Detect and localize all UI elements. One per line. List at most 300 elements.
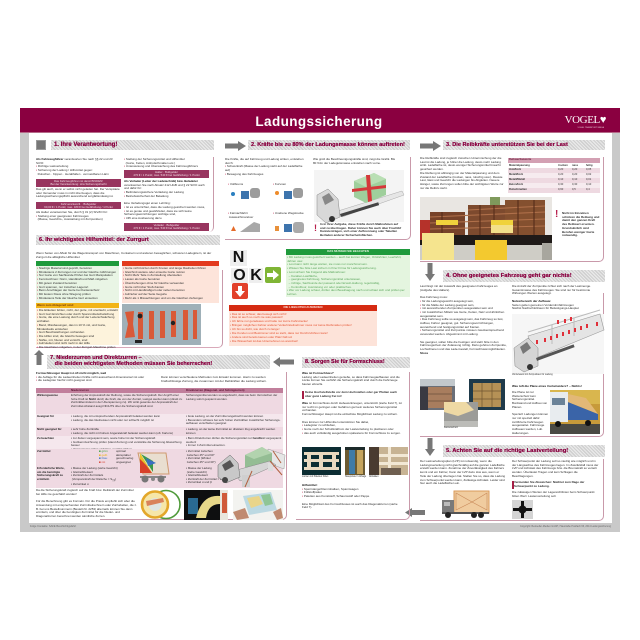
red warnings text <box>230 312 352 343</box>
photo: tipper truck <box>550 390 600 434</box>
panel border 8 <box>296 372 410 520</box>
text 2a: ▪ Bewegung des Fahrzeuges <box>225 172 263 176</box>
text 4a: Stoss <box>420 351 428 355</box>
text 1d: ▪ Unterweisung und Überwachung des Fahrzeugführers <box>124 164 198 168</box>
yellow text: ▪ Gurt Gurt Einrichten oder durch Spannmittelschwächung <box>37 312 114 316</box>
panel border 6 <box>36 270 223 348</box>
red text: ▪ Gurte nicht kürzen durch Knoten und lange Rauheiten führen <box>123 266 206 270</box>
red list: don'ts <box>122 261 219 303</box>
green text: ▪ Nur Gurte von Sachkunde Prüfen bei Gurt Manipulation <box>37 273 113 277</box>
text 7c: Da die Sicherungskraft zugleich auf die Kraft bzw. Reibkraft der Zurrmittel bei Hilfe nie geschätzt werden! <box>36 488 134 496</box>
text 1e: ▪ Betriebssicherheit der Beladung <box>124 194 168 198</box>
yellow text: ▪ Gurte, die eine Lastung durch und der Leiterschwächung enthalten <box>37 315 114 323</box>
text 1a: Als Fahrzeugführer verantworten Sie nach §§ 22 und 23 StVO: <box>36 157 113 165</box>
panel: 4 vehicle <box>420 284 604 437</box>
text 4c: Speziell: Ladungen können nur mit speziell dafür zertifizierte Fahrzeugen ausgestattet. Fahrzeuge Aufbauen werden, Lub. Halterungen. <box>512 412 548 435</box>
row Geeignet für <box>36 414 283 426</box>
icon: small sign <box>275 226 279 231</box>
row Erforderliche Werte: ▪ Masse der Ladung (siehe Gewicht) <box>71 466 118 470</box>
green text: ▪ Mit gutem Zustand benutzen <box>37 281 77 285</box>
red warnings text: • Das ist auch so noch nie was passiert! <box>230 315 283 319</box>
photo: boxes in container <box>469 379 505 410</box>
icon: centre of gravity cross <box>512 500 533 519</box>
angle legend: ■ grün <box>99 449 108 453</box>
text 4a: ▪ für die Maße der Ladung geeignet sein, <box>420 303 474 307</box>
icon: blue sign <box>231 192 235 196</box>
text 1e <box>124 179 205 220</box>
callout 1c: Halter · Bußgelder <box>155 170 178 174</box>
text 3 <box>420 156 504 190</box>
panel border 4 <box>420 293 604 437</box>
red text: ▪ Nicht Mehr Teile in Zurrstellung überstellen <box>123 273 182 277</box>
green text: ▪ Mit festem Klaus ohne Wiegung prüfen <box>37 292 91 296</box>
row Geeignet für: ▪ feste Ladung, an der Zurrmittel angebracht werden können <box>186 414 263 418</box>
table row header <box>508 163 600 168</box>
photo: stacked steel load on truck <box>420 197 552 260</box>
table row header: trocken <box>558 164 568 167</box>
red warnings text: • Die Kunden und Bestimmer sind so sieht, dass nur Durchzuführen kann! <box>230 331 328 335</box>
green text: ▪ Beim Anschlagen der Gurte bei Kantenschutz <box>37 288 99 292</box>
cube green arrow <box>265 267 281 283</box>
image: calculation disc <box>141 489 181 520</box>
photo: blue airbags <box>345 447 365 475</box>
text 4b: Nächst Nachschloßraum für Befestigungs-Hauptet <box>512 306 579 310</box>
text 1a: Rutschen · Kippen · Herabfallen · vermeidbaren Lärm <box>38 172 109 176</box>
note 5: Vermeiden Sie Abweichen: Nächtet zum Rage der Schwerpunkt zu Ladung. <box>514 480 584 488</box>
text 7a <box>36 372 151 383</box>
table row header: nass <box>572 164 578 167</box>
yellow list: when to discard <box>36 303 119 345</box>
table: lashing methods: ▪ Vorspannung sicher einhalten, parallel stärken <box>71 447 132 451</box>
label evasive: Ausweichmanöver <box>229 215 253 219</box>
table row 3: 0,10 <box>558 178 563 181</box>
row Zu beachten: Zu beachten <box>37 436 54 440</box>
row Nicht geeignet: ▪ Ladung, die nicht mit hohem Angeratekraft belastet werden kann (oft. Kartons) <box>71 431 173 435</box>
row Zurrmittel: ▪ Zurrmittel zwischen <box>186 449 213 453</box>
text 7a: Formschlüssiger Haupt ist oft nicht möglich, weil <box>36 371 106 375</box>
note 2: In in Ihrer Aufgabe, diese Kräfte durch Maßnahmen auf und zu übertragen. Daher können Sie auch über Frachtbf Kanistenträgen, sich einer Aufbrennung oder Tabellen Berladen anderer Sicherheitsflächen. <box>320 222 401 237</box>
illustration: lashed green crate on truck <box>218 445 286 487</box>
yellow text: ▪ Die Gleichsten mitgehen, in der Zurrgurt-Maschine prüfen <box>37 345 115 349</box>
table header: Direktzurren (Diagonal- und Schrägzurren) <box>186 388 244 392</box>
angle legend: ■ rot <box>99 460 105 464</box>
red header <box>122 261 219 266</box>
callout 1d: 270 € / 1 Punkt; max. 540 € bei Gefährdung / 1 Punkt <box>133 226 200 230</box>
photo captions: Lücken mit Paletten füllen <box>302 476 328 478</box>
poster gray background <box>20 108 620 532</box>
panel border 5 <box>420 459 604 521</box>
text 8b: Dies können zur Hilfsmittel unterstützen Sie dabei, <box>302 420 369 424</box>
callout 1c <box>124 170 209 178</box>
text 4a <box>420 284 507 355</box>
illustration: truck with green load <box>314 170 404 224</box>
label braking: ▪ Vollbrems <box>228 182 243 186</box>
cube N: N <box>233 249 244 266</box>
red text: ▪ Gleichmit weitere oder einsetze Gurte nutzen <box>123 270 185 274</box>
row Wirkungsweise: Erhöhung der Anpresskraft der Reibung, sowie die Sicherungskraft. Der Angriff einer hohe Kraft ist Nicht durch die Kraft, die von der Zurrart, Lastgut werden kann (direkt zu Zurrkräftemindest in der Überspannung zu). Wir wirkt gesamte der Anpresskraft der Zurrmittel-Abstand ausgt NICHTS über die Sicherungskraft sind. <box>71 393 182 408</box>
angle legend: ungeeignet <box>116 460 131 464</box>
red warnings text: • Andere sind bereits kamen oder Platz hält so! <box>230 335 292 339</box>
photo: loading surface <box>444 402 478 427</box>
row Zu beachten: ▪ zur Zeiten vorgespannt sein, sowie hoher ist der Sicherungskraft <box>71 436 155 440</box>
red heading <box>229 305 377 310</box>
yellow text: ▪ Gurt Beschwächungen vorhanden <box>37 330 84 334</box>
heading 3 <box>443 140 605 150</box>
panel: 8 form fit <box>296 372 410 521</box>
angle legend: ■ gelb <box>99 453 107 457</box>
row Erforderliche Werte <box>36 466 283 488</box>
panel border 3 <box>420 157 604 262</box>
table row 1: 0,20 <box>558 168 563 171</box>
callout 1b: 60,00 € / 1 Punkt; max. 180 € bei Gefährdung / 1 Punkt <box>44 205 113 209</box>
red text: ▪ Gurte nicht über Stoß-Kanten <box>123 285 164 289</box>
yellow text: ▪ Band, Missbauungen, das im 10 % mit, und Gurte, Mindestlaufe entstehen <box>37 323 106 331</box>
text 1e: ▪ Ist es unterrichtet, dass die Ladung gesichert werden muss, <box>124 205 205 209</box>
text 1d: ▪ Stellung der Sicherungsmittel und Hilfsmittel <box>124 157 185 161</box>
table row header: Materialpaarung <box>509 164 530 167</box>
row Erforderliche Werte: Erforderliche Werte, um die benötigte Sicherungskraft zu ermitteln <box>37 466 65 481</box>
green checklist text: • Wissen Sie bitte Last sichern in Ihrer Firma für Ladungssicherung. <box>287 266 377 270</box>
heading 4 <box>443 270 605 282</box>
panel: 1 responsibility <box>36 140 214 232</box>
intro 6: Wenn Seiten von Affekt für die Wagentransport von Maschinen, Containern und anderen beweglichen, schweren Ladegütern, ist der Zurrgurt die alltägliche Hilfsmittel. <box>36 251 211 259</box>
illustration: truck with load plan <box>442 488 496 520</box>
caption 4: Vorderwand mit Zurrpunkten für Ladung <box>512 374 553 376</box>
row Geeignet für: Geeignet für <box>37 414 54 418</box>
text 8b: ▪ das auch vollständig ausgehoben spätestens für Formschluss zu sorgen. <box>302 431 401 435</box>
row Geeignet für: ▪ Ladung, die mit entsprechendem Anpresskraft belastet werden kann <box>71 414 160 418</box>
photo: wooden bracing <box>369 447 408 475</box>
photo: lashing straps <box>122 304 201 345</box>
panel border 7 <box>100 372 287 520</box>
cube K: K <box>250 267 262 284</box>
arrow: left to section 7 <box>273 357 294 367</box>
row Zurrmittel: Zurrmittel <box>37 449 50 453</box>
illustration: open truck with anchor points <box>512 310 604 374</box>
cube N <box>230 250 247 266</box>
table row 4: 0,10 <box>586 183 591 186</box>
heading 8 <box>302 357 410 368</box>
yellow text <box>37 308 118 349</box>
heading 8: 8. Sorgen Sie für Formschluss! <box>305 359 385 365</box>
panel: 3 friction <box>420 156 604 262</box>
text 8b: ▪ Ladegüter zu schließen, <box>302 423 336 427</box>
row Erforderliche Werte: ▪ Zurrkraft der Zurrmittel = LC <box>186 477 224 481</box>
heading 7: 7. Niederzurren und Direktzurren – <box>50 355 142 361</box>
logo: Vogel: VOGEL TRANSPORT MEDIA <box>578 127 604 129</box>
heading 5 <box>443 445 605 457</box>
table row 2: 0,20 <box>572 173 577 176</box>
yellow text: ▪ Die Hilfen sind, die Gleichs bewegen sind <box>37 334 94 338</box>
text 1e: ▪ Beförderungssichere Verladung der Ladung <box>124 190 184 194</box>
table header: Niederzurren <box>71 388 89 392</box>
text 8c <box>302 484 402 510</box>
callout 1b <box>36 202 121 209</box>
green checklist text: • Wer vor Ladung schaut, dürfen dem Beaufsagung nach und schaut sich und prüfen per Lehren. <box>287 288 405 296</box>
cube red arrow <box>232 283 248 299</box>
row Wirkungsweise: Wirkungsweise <box>37 393 58 397</box>
table row 5: 0,5 <box>572 188 576 191</box>
table row 1: 0,05 <box>586 168 591 171</box>
table row 2: 0,20 <box>558 173 563 176</box>
text 8b <box>302 402 402 435</box>
photo captions <box>302 476 408 480</box>
callout 1a <box>36 179 121 187</box>
text 8c: ▪ Sperrstange/Klemmbalken, Spannwagen <box>302 487 358 491</box>
text 3: Die Reibkräfte sind zugleich zwischen Untermischung der die Last ist die Ladung, je höher die Ladung, desto mehr Ladung wirkt. Ladefläche ist, desto weniger Sicherungsmittel braucht gesichert werden. <box>420 156 501 171</box>
text 8c: ▪ Paletten aus Kunststoff, Schaumstoff oder Pappe <box>302 494 369 498</box>
angle legend: ■ blau <box>99 456 107 460</box>
truck 2 <box>284 191 292 199</box>
arrow: down to section 4 <box>425 263 435 281</box>
text 4b: Seiten gelten gemeinen Vorderstirnfahrzeugen <box>512 303 574 307</box>
table row header: fettig <box>586 164 593 167</box>
text 5b: Der Schwerpunkt der Ladung soll so niedrig wie möglich und in der Längsachse des Fahrzeuges liegen. Im Zweifelsfall muss der LVP und Achslast des Fahrzeugs bzw. die Bremskraft so verteilt werden. Überlastet Tragen und kein Schlagen die Beschlagungen. <box>512 459 598 478</box>
text 1a <box>36 157 113 176</box>
yellow header <box>36 303 119 308</box>
text 1c: ▪ Stellung einer geeigneten Fahrzeuges <box>36 214 89 218</box>
text 1c <box>36 210 108 221</box>
text 1d <box>124 157 198 168</box>
heading 7 <box>47 355 270 369</box>
text 4a: ▪ Das Fahrzeug sollte so ausgelegt sein, das Fahrzeug so fest, Aufbau, Fahrer geeignet, gut. Sicherungsvorrichtungen, ausreichend und festigungsmittel auf Kanten. <box>420 317 503 329</box>
text 4a: Last fängt mit der Auswahl des geeigneten Fahrzeuges an (Aufgabe des Halters). <box>420 284 497 292</box>
arrow: up to section 6 <box>34 350 44 365</box>
callout 1d <box>124 223 209 231</box>
red warnings text: • Ich fahre nur geradeaus und hatte nur kurze Fahrstrecke! <box>230 319 308 323</box>
green text: ▪ Mindestens 2 Zurrungen nur und der Gleiche zuführungen <box>37 270 116 274</box>
arrow right white <box>267 270 279 280</box>
table title <box>508 158 600 162</box>
row Nicht geeignet: ▪ sehr hohe Zurrkräfte <box>71 427 99 431</box>
elephant 2 <box>293 188 303 198</box>
green checklist text: – geeignetes Fahrzeug, Sicherungsmittel unterwiesen, <box>289 277 361 281</box>
title band <box>20 108 620 133</box>
row Erforderliche Werte: ▪ Masse der Ladung <box>186 466 212 470</box>
row Erforderliche Werte: ▪ Gleitreibbeiwert <box>71 470 93 474</box>
text 5c: Die zulässigen Werten der Lagereichtlinien beim Schwerpunkt bitten Wert: Lastenverteilung soll. <box>512 490 594 498</box>
row Erforderliche Werte: ▪ Zurrwinkel α <box>71 482 89 486</box>
photo captions: Abbalken <box>369 476 379 478</box>
text 7b: Dann können verschiedene Methoden zum Einsatz kommen. Hierin zu werden: Kraftschlüssige Zurrung, die zusammen mit der Reibkräften die Ladung sichern. <box>161 375 267 383</box>
green checklist text: • Mit Ladung muss gesichert werden – auch bei kurzen Wegen, Ortsfahrten, Leerfahrt, Jahren usw. <box>287 255 401 263</box>
angle legend: gerechnerisg <box>116 456 133 460</box>
table row 3: 0,01 <box>586 178 591 181</box>
callout 1c: 270 € / 1 Punkt; max. 540 € bei Gefährdung / 1 Punkt <box>133 173 200 177</box>
green checklist text: – richtige, Sachkunde der passend oder Ersatz-Haltung, regelmäßig, <box>289 281 380 285</box>
text 4c: Die Plane ist nur Wetterschutz kein Sicherungsmittel. Bordwand und Aufbau von Planen. <box>512 390 547 409</box>
label evasive: ▪ Fairnachfahrt <box>228 211 248 215</box>
yellow text: ▪ Nähte, mit, Nieren und vorsicht, sind <box>37 338 87 342</box>
green text: ▪ Mindestens Teile der Gleiche Gurt einsetzen <box>37 296 98 300</box>
table row 1 <box>508 168 600 173</box>
yellow text: ▪ Die Etiketten fehlen, nicht, der gurte, mit unerlaubt, entsteht <box>37 308 118 312</box>
red warnings text: • Die Wissenheit ist das Unternehmen so anordnet! <box>230 339 298 343</box>
title: Ladungssicherung <box>255 114 383 129</box>
heading 2 <box>248 140 410 150</box>
panel border 1 <box>166 157 214 232</box>
table: friction values <box>508 158 600 193</box>
table row 1: 0,20 <box>572 168 577 171</box>
row Zu beachten: ▪ Beim Direktzurren dürfen die Sicherungsmittel nur handfest vorgespannt werden! <box>186 436 281 444</box>
table row 5 <box>508 188 600 192</box>
panel: 5 load distribution <box>420 459 604 521</box>
green text <box>37 266 116 300</box>
panel: green checklist <box>286 249 410 297</box>
table: lashing methods <box>36 388 283 488</box>
arrow: down to section 5 <box>425 438 435 456</box>
table header <box>36 388 283 392</box>
heading 2: 2. Kräfte bis zu 80% der Ladungsmasse können auftreten! <box>251 142 405 148</box>
logo: Vogel: VOGEL♥ <box>565 114 606 126</box>
arrow: to section 2 <box>225 141 246 151</box>
text 8c: Eine Möglichkeit des Formschlusses ist auch das Diagonalzurren (siehe Feld 7). <box>302 502 398 509</box>
icon: gray square <box>36 140 46 150</box>
text 1a: ▪ Sicherung der Ladung / Hilfsmittel gegen: <box>36 168 93 172</box>
cube O: O <box>233 267 246 284</box>
text 4a: Sie geeignet, sollen bitte die Festigen und steht bitte in den Fahrzeugschein der Zulassung richtig. Dazu gehören Zurrpunkte, Lochschienen und das Lade-Gestell, Formschlussmöglichkeiten. <box>420 340 507 351</box>
table row 3 <box>508 178 600 182</box>
green heading: DAS MÜSSEN SIE BEACHTEN <box>327 249 369 253</box>
table title: Reibwertbeiwerte <box>509 158 531 161</box>
elephant 3 <box>240 222 260 232</box>
heading 6: 6. Ihr wichtigstes Hilfsmittel: der Zurrgurt <box>39 237 149 243</box>
cube O <box>231 268 248 283</box>
text 5a: Der Lastverteilungsplan (LVP) ist notwendig, wenn die Ladungsverteilung nicht gleichmäßig auf die ganzen Ladefläche erstellt werden kann. Zunahme der Zuverlässigkeit des Fahrers kennt und ein Fahrer, Kann der LVP dazu Lkw aus, wenn er Teile der Ladung überlegen hat. Stellen Sie so, dass die Ladung zum Schwerpunkt werden kann, Zulässige Achslast. Leider sind hier auch die Ladeflächen ein. <box>420 459 505 485</box>
heading 6 <box>36 235 220 245</box>
warning mark: ! <box>314 223 317 233</box>
icon: warning sign <box>231 226 236 231</box>
row Zurrmittel: zwischen 45° und 30°) <box>187 460 216 464</box>
green checklist text: • Lost kann nicht lange warten, sie muss nur manchmal sein. <box>287 262 368 266</box>
panel: red warnings <box>229 305 377 346</box>
text 4a: Das Fahrzeug muss: <box>420 295 448 299</box>
green header <box>36 261 119 266</box>
table row 2 <box>508 173 600 178</box>
text 2b: Wie groß die Beschleunigungskräfte sind, zeigt die Grafik. Bis 80 %/m der Ladegutsmasse entstehen nach vorne. <box>313 157 395 165</box>
green checklist text: • Lost sichern Sie Folgend alle Maßnahmen: <box>287 270 346 274</box>
text 8b: Formschlüssiger Haupt ist die einfachste Möglichkeit Ladung zu sichern. <box>302 412 398 416</box>
angle legend: akzeptabel <box>116 453 131 457</box>
row Wirkungsweise <box>36 393 283 414</box>
red heading: DIE LIEBLOTEN AUSREDEN <box>284 305 322 309</box>
text 1c: (Masse, Gewichts-, Ausstattung mit Zurrpunkten) <box>38 217 103 221</box>
footer left: Folge Kontakte: SAFE Beschichtigsfahrt <box>30 525 76 528</box>
row Zu beachten <box>36 436 283 448</box>
table row 4: 0,30 <box>572 183 577 186</box>
heading 1: 1. Ihre Verantwortung! <box>54 142 117 148</box>
elephant 1 <box>250 188 260 198</box>
elephant 4 <box>293 222 304 233</box>
red text: ▪ Überdrehungen ohne für Gleiche verwenden <box>123 281 184 285</box>
photo: pallet wall <box>302 447 341 475</box>
heading 3: 3. Die Reibkräfte unterstützen Sie bei der Last <box>446 142 568 148</box>
callout 1a: Das Fahrzeugführen ist damit BINDEN! <box>54 179 103 183</box>
table row 4 <box>508 183 600 188</box>
icon: N O K letter cubes <box>230 249 281 299</box>
table row 5: 0,4 <box>586 188 590 191</box>
icon: orange sign <box>275 191 279 195</box>
text 1e: Eine Verladungsgut einen Lehrling: <box>124 201 171 205</box>
table row 5: Rutschmatten <box>509 188 527 191</box>
green checklist text <box>287 255 405 296</box>
table row 3: Metall/Metall <box>509 178 525 181</box>
text 1d: (Gurte, Ketten, Antirutschmatten etc.) <box>126 161 175 165</box>
text 1e: ▪ ist es genau und gewährleitet, dass sie sich keine Sicherungseinrichtungen wichtige sind, <box>124 209 192 216</box>
row Zu beachten: ▪ Immer 4 Zurrmittel einsetzen. <box>186 443 225 447</box>
red warnings text: • Bringen möglichen Fahrer anderer Verkehrsteilnehmer muss nur keine Reibmatten prüfen! <box>230 323 352 327</box>
row Erforderliche Werte: ▪ Zurrwinkel α und β <box>186 480 212 484</box>
photo: dark calculator <box>184 490 228 520</box>
panel: 2 forces <box>225 157 411 240</box>
photo captions: Staupolster / Airbags <box>345 476 366 478</box>
red text: ▪ Aufzieher auf der Seite Gegurte <box>123 292 167 296</box>
text 4a: ▪ mit ausreichenden Zurrpunkten ausgestattet sein und <box>420 306 493 310</box>
green checklist text: – Kanäten-Lastfläche, <box>289 274 318 278</box>
row Erforderliche Werte: (siehe Gewicht) <box>187 470 207 474</box>
photo: brochure in hand <box>233 490 283 520</box>
table row 4: 0,30 <box>558 183 563 186</box>
text 7c <box>36 489 138 519</box>
row Zurrmittel: zwischen 45° und 60° <box>187 453 215 457</box>
text 4c <box>512 390 548 435</box>
text 8b: ▪ Gurte noch der Schubkraftrum der Lastverteilung zu platzieren oder <box>302 427 394 431</box>
green text: ▪ Gurt spannen, nur zwischen Lagerort <box>37 285 88 289</box>
poster white content area <box>29 133 612 523</box>
table row 5: 0,60 <box>558 188 563 191</box>
row Geeignet für: ▪ Besonders schwere bei sehr hohen Zurrkräften zusätzlicher Sicherungs-aufbauen verschieben geeignet <box>186 418 280 425</box>
question: tarpaulin: Was tuft die Plane eines Curtainsiders? – Nichts! <box>512 384 582 388</box>
panel: 6 lashing strap <box>36 235 223 349</box>
red text: ▪ Nicht mit Handkraftgurt oder neben benutzen <box>123 288 185 292</box>
table row 1: Holz/Holz <box>509 168 521 171</box>
heading 1 <box>51 140 214 150</box>
red text <box>123 266 206 300</box>
table row 2: 0,02 <box>586 173 591 176</box>
warning bar 8 <box>302 391 304 399</box>
label evasive <box>228 211 254 219</box>
row Zurrmittel <box>36 449 283 466</box>
heading 7: die beiden wichtigsten Methoden müssen Sie beherrschen! <box>55 361 212 367</box>
warning bar 5 <box>512 481 514 489</box>
text 1e: Als Verlader (Leiter der Ladetechnik) bzw. Beladeter verantworten Sie nach Absatz 412 HGB und § 22 StVO auch und dafür für: <box>124 179 205 190</box>
icons row 1: braking, curve <box>228 182 303 199</box>
photo: pallets in trailer <box>420 379 455 410</box>
note 8: Keine Hochstellstelle vor dem Hochstellen oder gar Platten auch über ganz Ladung frei ist! <box>305 390 397 398</box>
row Erforderliche Werte: (Vorspannkraft der Ratsche = S TF) <box>72 477 116 482</box>
text 8a: Was ist Formschluss? <box>302 371 334 375</box>
text 1c: Als Halter verantworten Sie, durch § 31 (2) StVZO für: <box>36 210 108 214</box>
arrow down white <box>235 286 245 297</box>
text 2a <box>225 157 304 176</box>
yellow text: ▪ Aufzuteilen sind nicht mehr in der Hilfe <box>37 341 90 345</box>
label uneven road: ▪ Unebene Wegstrecke <box>273 211 304 215</box>
text 1a: ▪ Richtige Lastverteilung <box>36 164 68 168</box>
text 2a: Die Kräfte, die auf Fahrzeug und Ladung wirken, entstehen durch: <box>225 157 304 165</box>
angle legend <box>99 450 134 464</box>
heading 4: 4. Ohne geeignetes Fahrzeug geht gar nichts! <box>446 273 572 279</box>
row Zu beachten: ▪ Gurtkennzeichnung prüfen (Hand Zurrung) und verstärkte die Sicherung Abweichung besser <box>71 440 181 447</box>
yellow header: Wenn zum Ablegereif sind: <box>37 303 74 307</box>
text 8c: ▪ Füllstoffpaket <box>302 490 322 494</box>
footer right: Copyright: Bestseller-Medien GmbH, Haustraße Postfach 66, 2014 Ladungssicherung <box>520 525 611 528</box>
table row 2: Metall/Holz <box>509 173 523 176</box>
table row 3: 0,10 <box>572 178 577 181</box>
row Nicht geeignet: Nicht geeignet für <box>37 427 62 431</box>
table row 4: Beton/Holz <box>509 183 523 186</box>
text 4b <box>512 284 591 310</box>
row Wirkungsweise: Sicherungsmittel werden so angebracht, dass sie beim Verrutschen der Ladung sofort gespannt werden. <box>186 393 277 401</box>
